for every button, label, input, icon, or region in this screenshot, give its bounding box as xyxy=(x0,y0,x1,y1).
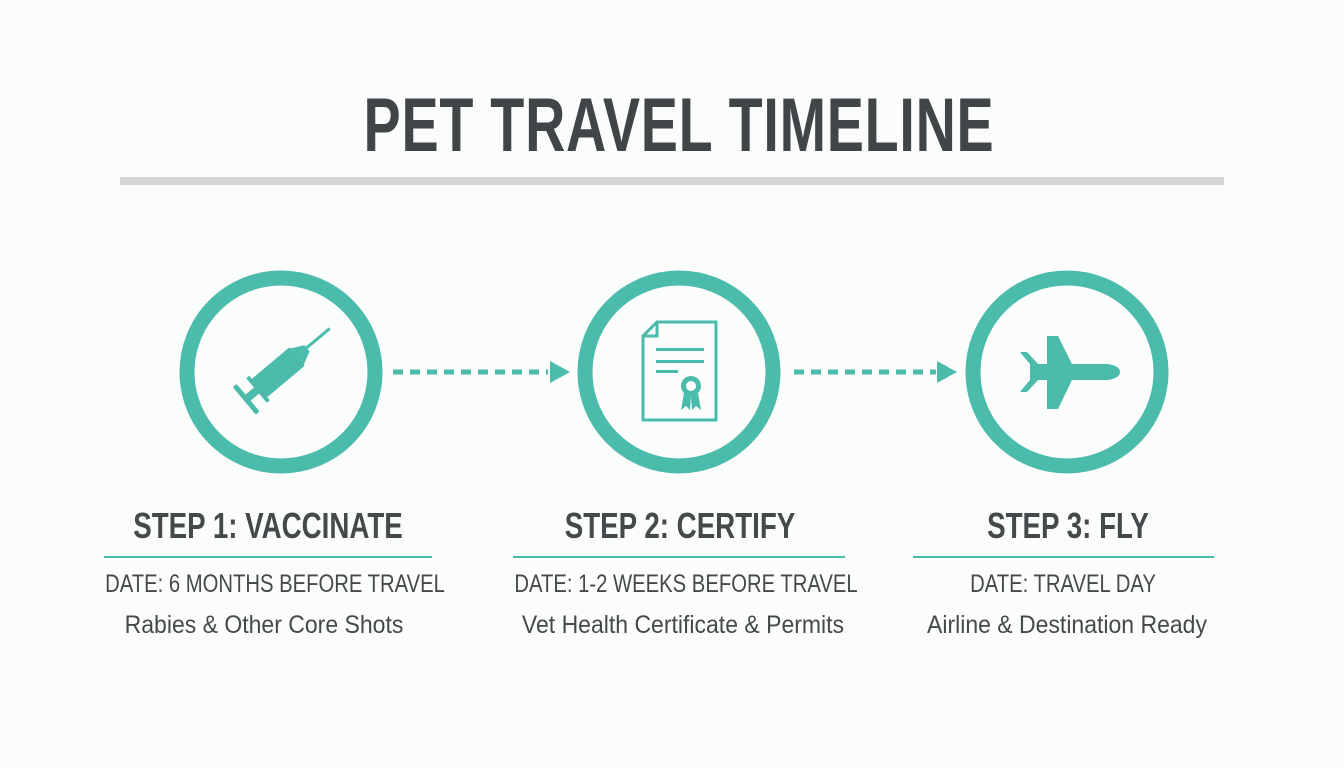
arrow 1 xyxy=(393,361,570,383)
step 2 circle with certificate icon xyxy=(585,278,773,466)
text: DATE: TRAVEL DAY xyxy=(970,570,1156,598)
text: DATE: 6 MONTHS BEFORE TRAVEL xyxy=(105,570,445,598)
step 1 text block xyxy=(104,505,445,639)
text: Vet Health Certificate & Permits xyxy=(522,611,844,639)
title: PET TRAVEL TIMELINE xyxy=(364,83,994,168)
arrow 2 xyxy=(794,361,957,383)
step 3 circle with airplane icon xyxy=(973,278,1161,466)
text: DATE: 1-2 WEEKS BEFORE TRAVEL xyxy=(514,570,858,598)
text: STEP 1: VACCINATE xyxy=(133,505,403,546)
step 2 text block xyxy=(513,505,858,639)
text: Rabies & Other Core Shots xyxy=(125,611,403,639)
text: STEP 2: CERTIFY xyxy=(565,505,795,546)
text: STEP 3: FLY xyxy=(987,505,1149,546)
text: Airline & Destination Ready xyxy=(927,611,1207,639)
step 3 text block xyxy=(913,505,1214,639)
step 1 circle with syringe icon xyxy=(187,278,375,466)
title underline xyxy=(120,177,1224,185)
